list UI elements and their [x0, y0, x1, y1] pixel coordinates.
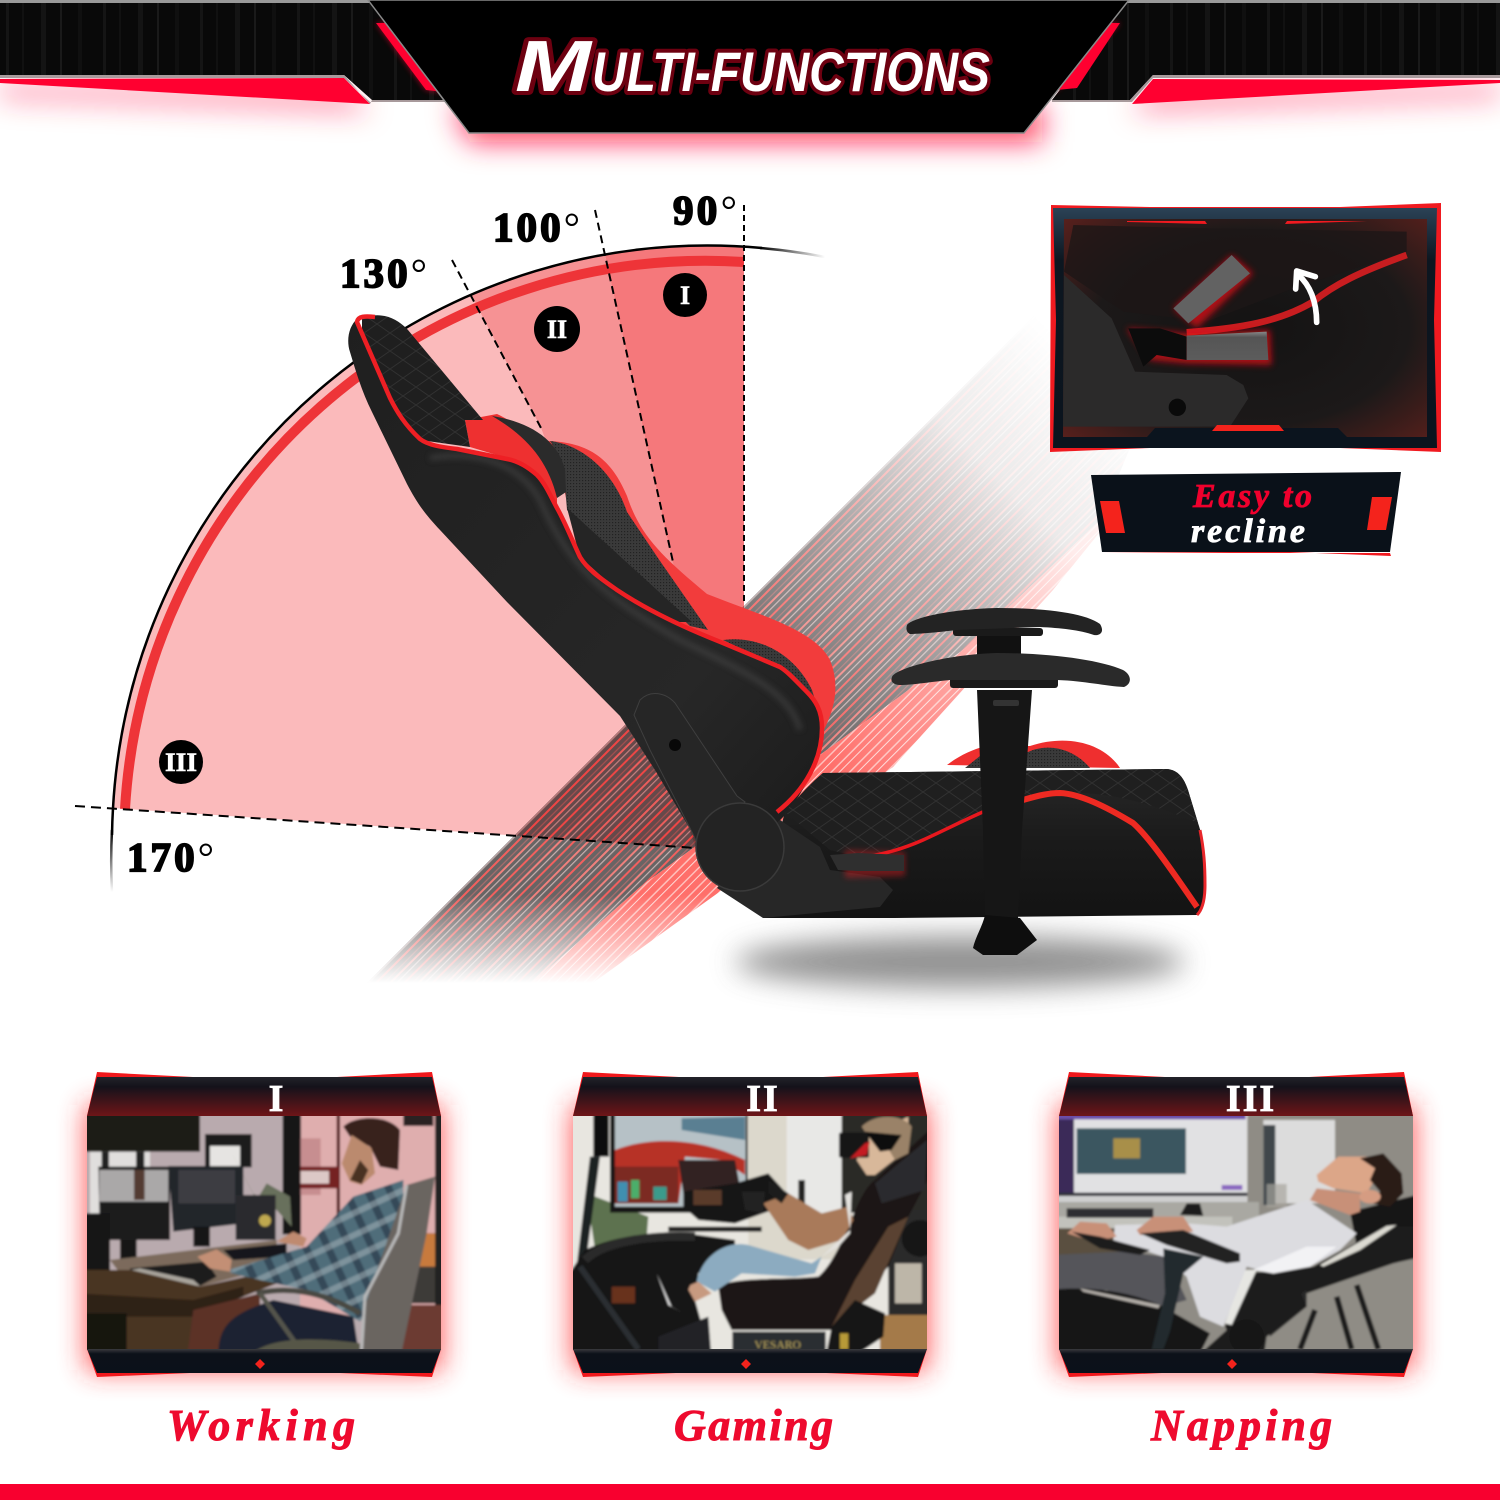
working glow	[87, 1105, 441, 1370]
dashed line 130 degrees	[452, 260, 541, 428]
working header bar	[87, 1077, 441, 1116]
gaming numeral: II	[746, 1078, 780, 1120]
upper lever	[1173, 255, 1250, 323]
seat red piping right	[1023, 793, 1197, 907]
seat quilted top	[785, 769, 1198, 857]
title: ULTI-FUNCTIONS	[592, 40, 990, 103]
working footer bar	[87, 1349, 441, 1373]
seat quilting	[1064, 225, 1407, 290]
recline photo	[1063, 219, 1427, 437]
badge I	[663, 273, 707, 317]
diagonal speed stripes	[374, 356, 1117, 978]
label 170 degrees: 170°	[127, 834, 214, 880]
back mesh	[550, 441, 708, 630]
inner red arc	[125, 261, 744, 809]
dashed line 170 degrees	[75, 806, 696, 848]
back red piping	[357, 317, 822, 812]
caption: working: Working	[167, 1401, 355, 1450]
pivot bracket arm	[634, 694, 745, 850]
lower lever	[1187, 332, 1268, 360]
red outer back bolster	[547, 441, 835, 738]
seat edge red trim	[1197, 830, 1205, 915]
recline detail panel	[1050, 203, 1441, 452]
header glow	[0, 84, 1500, 142]
gaming header bar	[573, 1077, 927, 1116]
VESARO logo text: VESARO	[754, 1338, 801, 1352]
napping glow	[1059, 1105, 1413, 1370]
red sliver left	[376, 23, 445, 92]
badge II	[534, 306, 580, 352]
label 100 degrees: 100°	[493, 204, 580, 250]
working numeral: I	[269, 1078, 283, 1120]
badge III	[159, 740, 203, 784]
sliver glow	[376, 23, 1120, 92]
gaming photo	[573, 1116, 927, 1350]
bottom red bar	[0, 1484, 1500, 1500]
far side seat bolster	[947, 741, 1120, 768]
pivot disc	[696, 803, 784, 891]
recline tab	[1212, 425, 1284, 431]
small recline lever	[830, 850, 905, 878]
red wedge right	[1132, 79, 1500, 104]
easy to recline plate	[1091, 472, 1401, 556]
napping header bar	[1059, 1077, 1413, 1116]
headrest quilted	[362, 315, 483, 447]
dashed line 90 degrees	[743, 205, 745, 605]
plate red mark left	[1100, 501, 1125, 533]
lower lumbar mesh	[723, 639, 821, 720]
gaming frame	[573, 1072, 927, 1377]
bracket plate	[1063, 275, 1248, 427]
arm post foot	[973, 915, 1037, 955]
lever glow	[1127, 255, 1272, 365]
height adjust lever	[993, 700, 1019, 706]
sector II	[471, 255, 720, 848]
dark head pillow	[492, 416, 566, 498]
panel: napping	[1050, 1072, 1423, 1377]
mechanism plate	[717, 820, 893, 918]
header dark textured strip left	[0, 0, 443, 100]
plate text: Easy to	[1192, 478, 1312, 515]
header dark textured strip right	[1052, 0, 1500, 100]
plate text: recline	[1191, 513, 1305, 550]
napping diamond	[1227, 1359, 1237, 1369]
lower armrest	[891, 653, 1130, 688]
seat body	[760, 769, 1205, 918]
plate text	[1191, 478, 1312, 550]
recline top strips	[1127, 221, 1367, 224]
plate hole	[1169, 399, 1186, 416]
napping frame	[1059, 1072, 1413, 1377]
inner back cushion	[567, 508, 692, 622]
badge II: II	[547, 315, 567, 344]
label 90 degrees: 90°	[673, 187, 737, 233]
arrow	[1296, 271, 1317, 322]
bracket hole	[669, 739, 681, 751]
napping photo	[1059, 1116, 1413, 1350]
napping numeral: III	[1226, 1078, 1276, 1120]
sector I	[605, 246, 744, 650]
gaming chair	[348, 315, 1205, 955]
recline frame red	[1050, 203, 1441, 452]
centre black trapezoid	[368, 0, 1129, 133]
red piping	[1187, 255, 1407, 332]
plate red mark right	[1367, 497, 1392, 530]
red sliver right	[1057, 23, 1120, 90]
header banner	[0, 0, 1500, 142]
recline frame navy	[1053, 208, 1437, 448]
upper armrest	[906, 608, 1102, 636]
recline angle diagram	[75, 187, 1150, 985]
shell highlight	[430, 456, 800, 730]
red head pillow strap	[465, 414, 557, 508]
caption: napping: Napping	[1150, 1401, 1332, 1450]
gaming glow	[573, 1105, 927, 1370]
sector III	[113, 295, 696, 848]
working diamond	[255, 1359, 265, 1369]
badge III: III	[165, 748, 197, 777]
label 130 degrees: 130°	[340, 250, 427, 296]
panel: working	[77, 1072, 452, 1377]
gaming footer bar	[573, 1349, 927, 1373]
napping footer bar	[1059, 1349, 1413, 1373]
back shell	[348, 319, 822, 862]
caption: gaming: Gaming	[674, 1401, 833, 1450]
seat red piping left	[860, 811, 985, 857]
gaming diamond	[741, 1359, 751, 1369]
dashed line 100 degrees	[595, 210, 673, 562]
outer black arc	[112, 246, 762, 835]
arm post lower	[977, 690, 1032, 918]
black arc lower tail	[110, 830, 113, 892]
red wedge left	[0, 78, 370, 104]
working frame	[87, 1072, 441, 1377]
arm post stem	[977, 632, 1021, 658]
black arc right tail	[760, 248, 825, 257]
lever mount	[1128, 328, 1187, 367]
panel: gaming	[565, 1072, 938, 1377]
badge I: I	[680, 281, 690, 310]
floor shadow	[735, 936, 1185, 988]
working photo	[87, 1116, 441, 1350]
title: M	[515, 27, 594, 107]
